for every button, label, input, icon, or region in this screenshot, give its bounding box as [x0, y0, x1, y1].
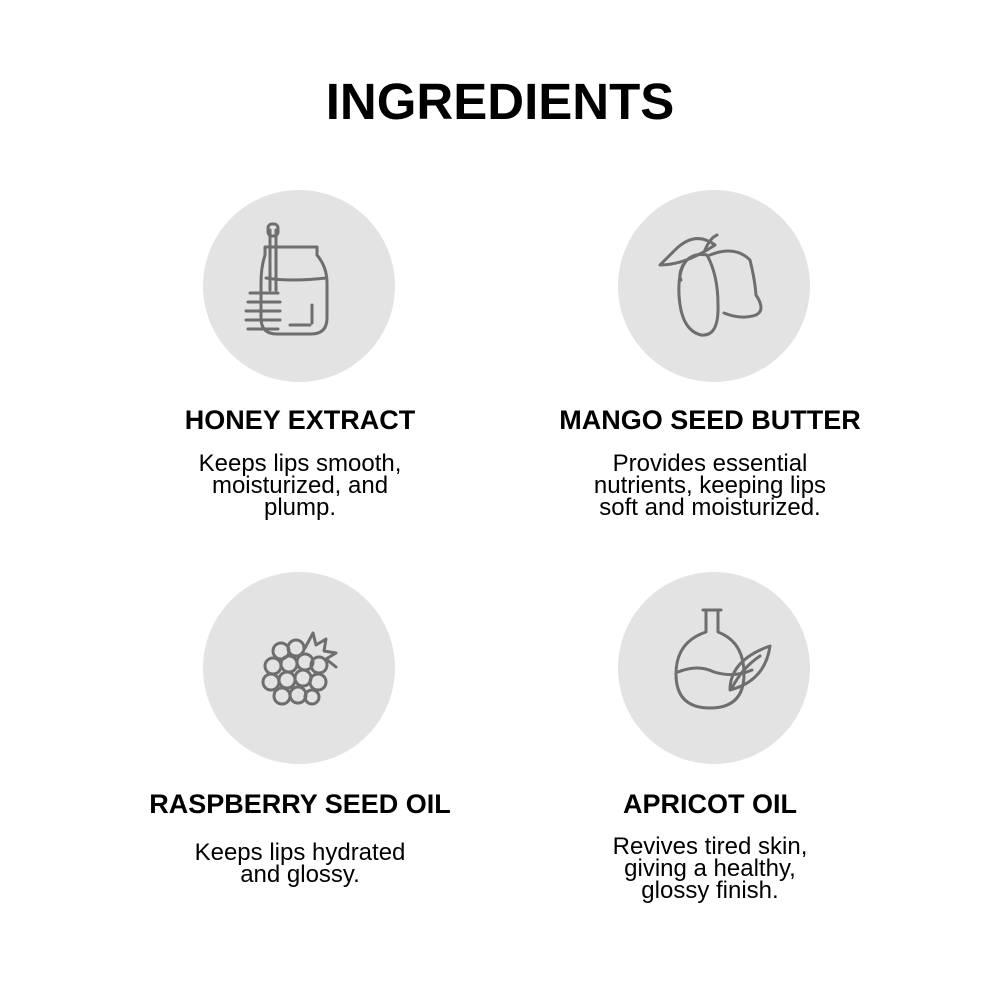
icon: raspberry — [203, 572, 395, 764]
text: honey: plump. — [264, 494, 336, 521]
heading: mango: MANGO SEED BUTTER — [559, 405, 861, 435]
text: mango: nutrients, keeping lips — [594, 472, 826, 499]
heading: apricot: APRICOT OIL — [623, 789, 797, 819]
title: INGREDIENTS — [326, 73, 674, 130]
text: honey: Keeps lips smooth, — [199, 450, 401, 477]
icon: mango — [618, 190, 810, 382]
text: apricot: glossy finish. — [641, 877, 779, 904]
text: raspberry — [195, 839, 405, 888]
text: raspberry: Keeps lips hydrated — [195, 839, 405, 866]
icon: flask with leaf — [618, 572, 810, 764]
text: apricot — [613, 833, 807, 904]
text: honey: moisturized, and — [212, 472, 388, 499]
heading: raspberry: RASPBERRY SEED OIL — [149, 789, 451, 819]
text: apricot: Revives tired skin, — [613, 833, 807, 860]
heading: honey extract: HONEY EXTRACT — [185, 405, 415, 435]
text: mango: soft and moisturized. — [599, 494, 821, 521]
text: mango — [594, 450, 826, 521]
text: raspberry: and glossy. — [240, 861, 360, 888]
icon: honey jar — [203, 190, 395, 382]
text: mango: Provides essential — [613, 450, 807, 477]
text: apricot: giving a healthy, — [624, 855, 796, 882]
text: honey — [199, 450, 401, 521]
